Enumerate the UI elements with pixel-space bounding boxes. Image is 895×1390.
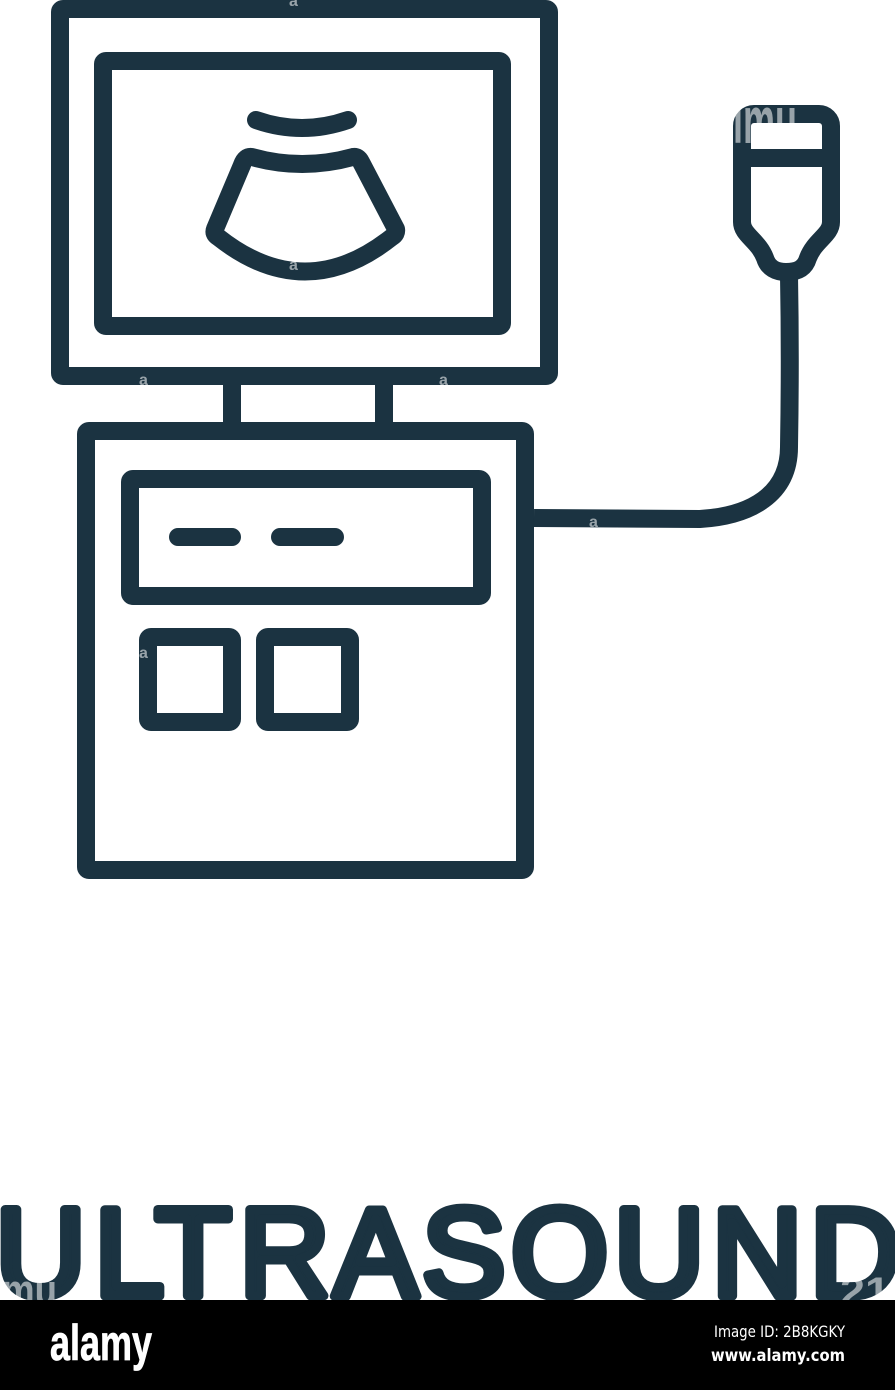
watermark fragments: a [589, 514, 598, 531]
footer band [0, 1300, 895, 1390]
monitor stand [232, 376, 384, 431]
button left [148, 637, 232, 722]
scan sector [214, 157, 396, 272]
scan arc [256, 120, 348, 128]
button right [265, 637, 350, 722]
watermark fragments: a [439, 372, 448, 389]
probe cable [534, 275, 790, 519]
icon: ultrasound machine [60, 9, 831, 870]
watermark fragments: a [139, 645, 148, 662]
watermark fragments: mu [2, 1266, 57, 1315]
watermark fragments: a [289, 257, 298, 274]
machine body [86, 431, 525, 870]
title: ULTRASOUND [0, 1184, 895, 1323]
image id: Image ID: 2B8KGKY [714, 1322, 845, 1341]
website: www.alamy.com [711, 1346, 845, 1366]
watermark fragments: a [139, 372, 148, 389]
monitor screen [103, 61, 502, 326]
monitor frame [60, 9, 549, 376]
panel indicators [178, 528, 335, 546]
control panel [130, 479, 482, 596]
watermark fragments: lmu [733, 83, 797, 157]
watermark fragments: 21 [840, 1270, 890, 1314]
alamy logo: alamy [50, 1315, 152, 1371]
probe band [742, 149, 831, 167]
probe head [742, 114, 831, 272]
